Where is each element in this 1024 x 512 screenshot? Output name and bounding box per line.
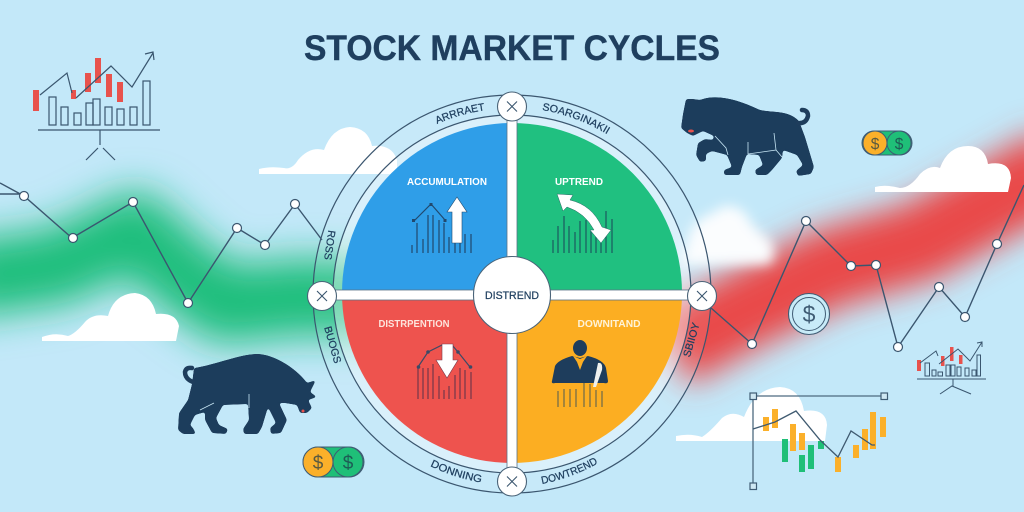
quadrant: downtrend — [517, 300, 682, 463]
icon: coins lower left — [303, 447, 364, 477]
label: uptrend: UPTREND — [555, 176, 603, 188]
cycle wheel — [307, 92, 717, 496]
icon: bottom marker — [498, 467, 526, 496]
cloud: upper left — [259, 127, 397, 174]
ring label: left lower: BUOGS — [321, 325, 343, 365]
ring label: left upper: ROSS — [321, 229, 337, 261]
icon: coins upper right: $ — [895, 136, 904, 153]
right line chart — [711, 185, 1024, 352]
icon: distribution chart with down arrow — [417, 344, 472, 399]
cloud: lower right — [676, 387, 827, 441]
icon: downtrend businessman — [552, 340, 608, 407]
icon: top left chart on stand — [33, 52, 160, 160]
cloud: upper right — [875, 146, 1011, 192]
quadrant: distribution — [342, 300, 507, 463]
outer ring — [313, 95, 711, 493]
icon: small right chart on stand — [917, 342, 986, 394]
title: STOCK MARKET CYCLES — [304, 29, 720, 68]
icon: left marker — [308, 282, 336, 310]
ring label: bottom right: DOWTREND — [541, 458, 597, 484]
ring label: right lower: SBIIOY — [681, 321, 702, 358]
icon: top marker — [498, 92, 526, 121]
center hub: DISTREND — [485, 290, 539, 302]
cloud: lower left — [42, 293, 179, 341]
spokes — [334, 118, 690, 473]
label: accumulation: ACCUMULATION — [407, 176, 487, 188]
icon: coins upper right — [862, 131, 912, 155]
icon: bear upper right — [681, 97, 814, 176]
icon: coins lower left: $ — [343, 453, 354, 474]
ring label: bottom left: DONNING — [430, 460, 482, 482]
green market band — [0, 230, 380, 305]
red market band — [670, 165, 1024, 350]
center hub — [474, 256, 550, 334]
label: downtrend: DOWNITAND — [578, 318, 641, 330]
icon: bottom right candlestick chart — [750, 393, 888, 490]
ring label: top right: SOARGINAKII — [542, 103, 610, 134]
icon: coins lower left: $ — [313, 453, 324, 474]
quadrant: accumulation — [342, 123, 507, 290]
ring label: top left: ARRRAET — [436, 103, 484, 124]
icon: right marker — [688, 282, 716, 310]
left line chart — [0, 183, 322, 308]
icon: accumulation chart with up arrow — [412, 197, 471, 253]
icon: coins upper right: $ — [871, 136, 880, 153]
label: distribution: DISTRPENTION — [378, 318, 450, 330]
icon: uptrend chart with double arrow — [553, 194, 612, 253]
cloud: blurred right — [680, 206, 774, 265]
icon: dollar medallion: $ — [803, 301, 816, 327]
quadrant: uptrend — [517, 123, 682, 290]
icon: dollar medallion — [788, 294, 830, 334]
icon: bear lower left — [178, 354, 317, 434]
